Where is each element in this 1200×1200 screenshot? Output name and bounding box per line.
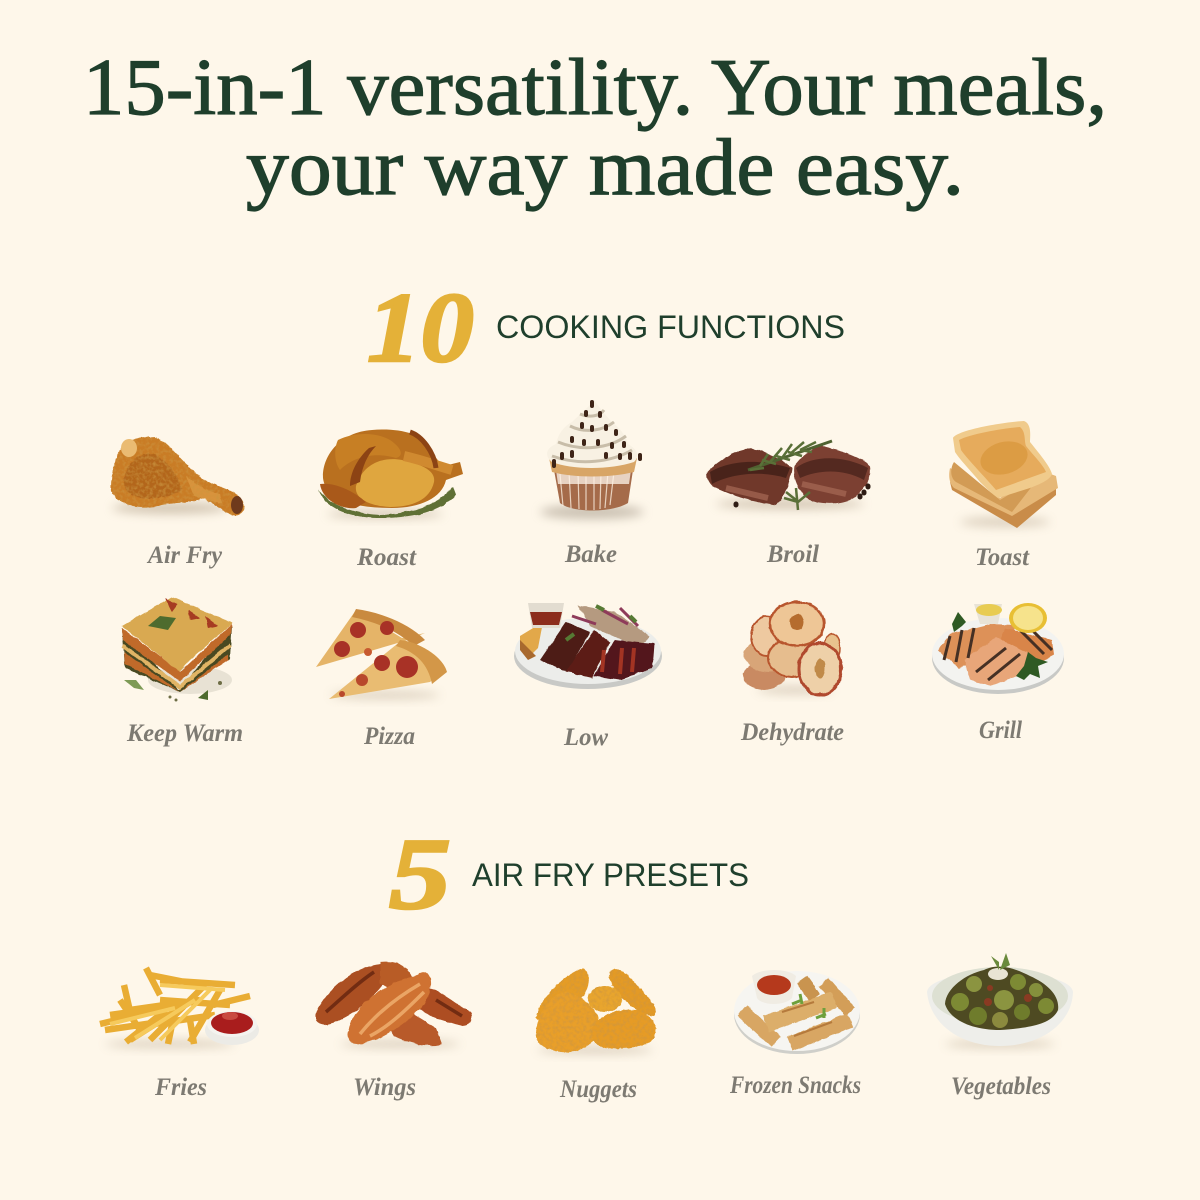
- label: Wings: Wings: [353, 1074, 416, 1101]
- icon: vegetable bowl: [927, 953, 1073, 1048]
- icon: air fry drumstick: [111, 437, 244, 516]
- icon: cupcake: [540, 400, 644, 519]
- icon: lasagna: [122, 597, 233, 702]
- label: Vegetables: Vegetables: [951, 1073, 1051, 1100]
- label: Air Fry: Air Fry: [146, 542, 223, 569]
- label: Dehydrate: Dehydrate: [740, 719, 844, 746]
- heading: 5 air fry presets: [389, 818, 749, 931]
- label: Bake: Bake: [564, 541, 617, 568]
- heading: 5 air fry presets: 5: [389, 818, 451, 931]
- label: Roast: Roast: [356, 544, 417, 571]
- icon: toast stack: [949, 421, 1058, 528]
- label: Nuggets: Nuggets: [559, 1076, 637, 1103]
- label: Fries: Fries: [154, 1074, 207, 1101]
- icon: frozen snacks plate: [734, 970, 860, 1054]
- label: Keep Warm: Keep Warm: [126, 720, 243, 747]
- title: [83, 42, 1107, 212]
- label: Grill: Grill: [979, 717, 1022, 744]
- title: 15-in-1 versatility. Your meals,: [83, 42, 1107, 132]
- heading: 10 cooking functions: 10: [367, 272, 474, 383]
- icon: pizza slices: [316, 609, 447, 699]
- icon: fries with ketchup: [100, 968, 259, 1048]
- icon: chicken wings: [315, 962, 472, 1048]
- icon: ribs plate: [514, 603, 662, 689]
- heading: 5 air fry presets: AIR FRY PRESETS: [472, 857, 749, 893]
- icon: nuggets: [536, 968, 656, 1054]
- heading: 10 cooking functions: COOKING FUNCTIONS: [496, 309, 845, 345]
- title: your way made easy.: [246, 122, 964, 212]
- heading: 10 cooking functions: [367, 272, 845, 383]
- icon: roast chicken: [318, 430, 463, 518]
- label: Pizza: Pizza: [363, 723, 415, 750]
- icon: broil steak: [707, 441, 870, 510]
- icon: grilled salmon plate: [932, 603, 1064, 694]
- label: Frozen Snacks: Frozen Snacks: [729, 1072, 861, 1099]
- label: Broil: Broil: [766, 541, 819, 568]
- label: Low: Low: [563, 724, 608, 751]
- icon: dehydrated apple chips: [743, 602, 841, 695]
- label: Toast: Toast: [975, 544, 1030, 571]
